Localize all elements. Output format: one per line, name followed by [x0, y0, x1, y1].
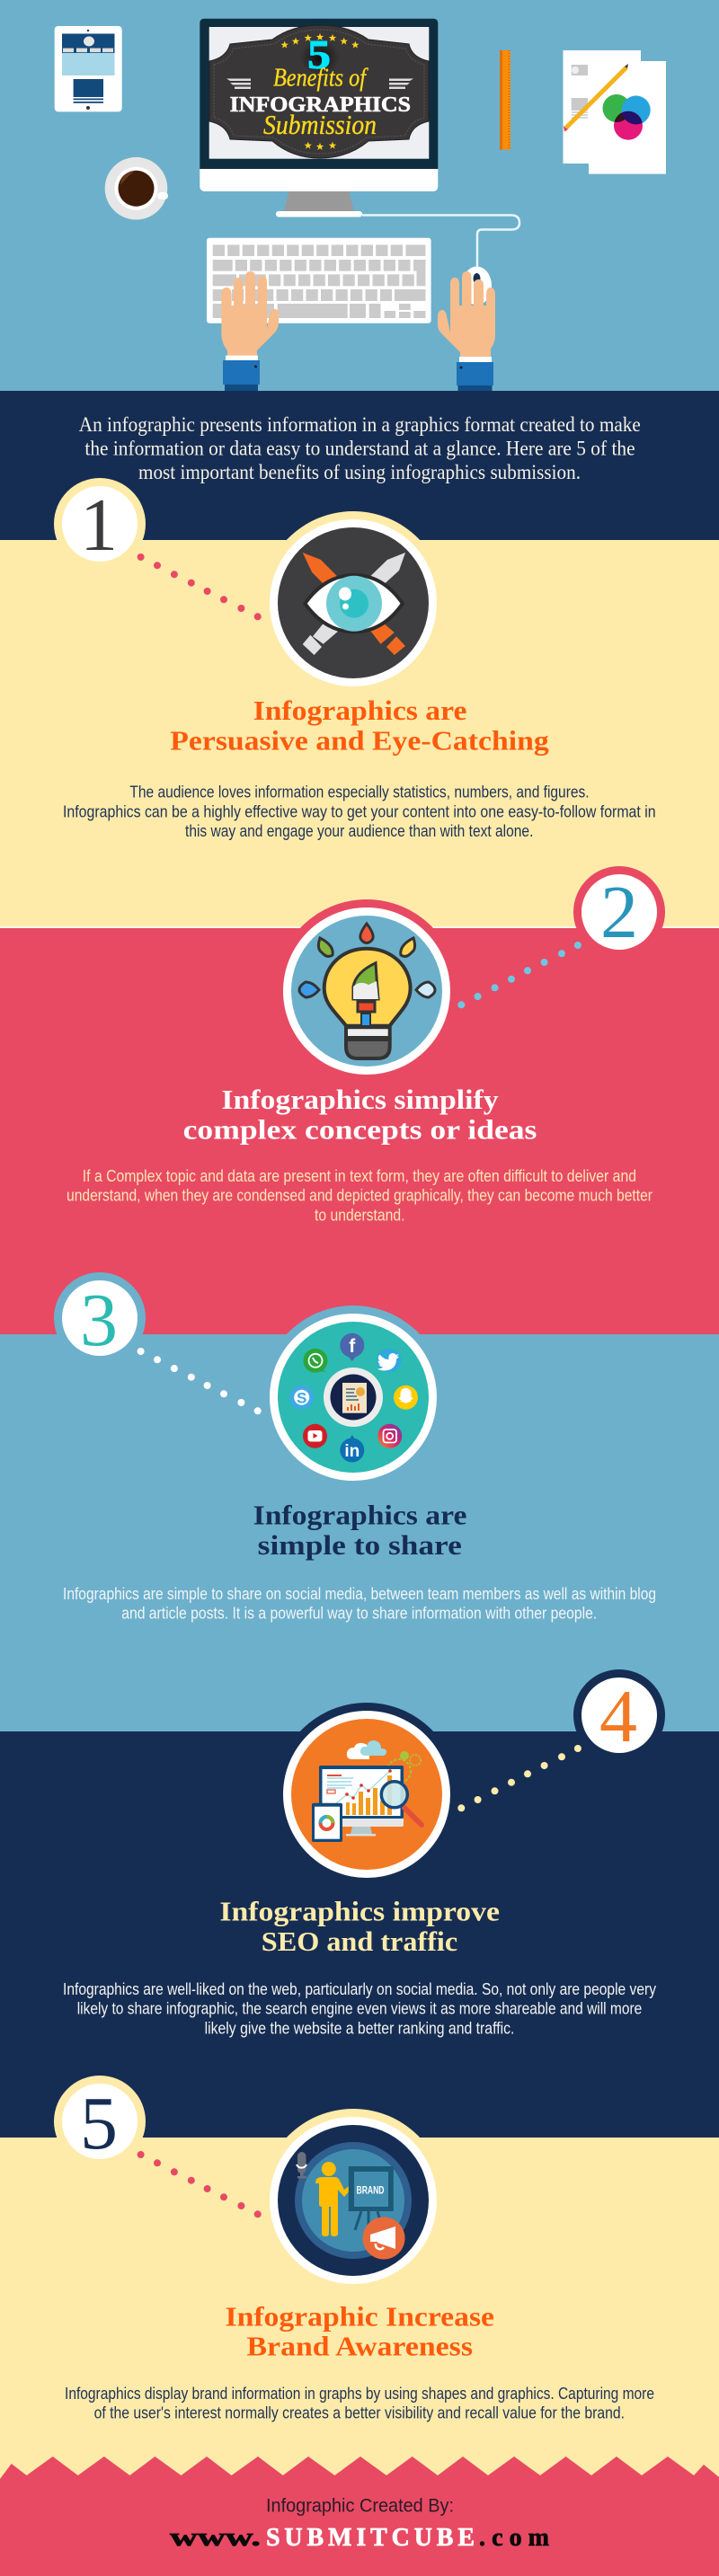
icon: coffee cup — [105, 157, 168, 219]
body text 1 — [63, 783, 656, 840]
icon: ruler — [500, 50, 510, 149]
social icons — [289, 1333, 418, 1463]
panel: benefit 5 — [0, 2076, 719, 2479]
social icons: in — [344, 1442, 360, 1461]
title plaque: Submission — [263, 109, 377, 140]
title plaque: Benefits of — [273, 64, 368, 93]
heading 1: Infographics are — [253, 695, 466, 726]
text: introduction paragraph: the information or data easy to understand at a glance. Here are 5 of the — [84, 437, 635, 460]
icon: brand presenter: BRAND — [356, 2183, 385, 2196]
footer website — [170, 2524, 549, 2552]
icon: SEO analytics on monitor — [275, 1703, 458, 1886]
body text 2: to understand. — [315, 1206, 404, 1224]
body text 4: likely to share infographic, the search engine even views it as more shareable and will more — [77, 2000, 642, 2018]
panel: benefit 3 — [0, 1272, 719, 1731]
number badge 1 — [54, 478, 146, 570]
icon: mouse — [462, 266, 492, 305]
heading 3 — [253, 1500, 466, 1561]
icon: monitor — [200, 19, 438, 217]
body text 5: of the user's interest normally creates a better visibility and recall value for the brand. — [94, 2404, 625, 2422]
heading 2: complex concepts or ideas — [183, 1113, 537, 1145]
number badge 5 — [54, 2076, 146, 2167]
heading 3: simple to share — [258, 1529, 462, 1561]
footer website: SUBMITCUBE — [266, 2524, 475, 2552]
heading 1: Persuasive and Eye-Catching — [170, 724, 549, 756]
social icons: S — [297, 1389, 306, 1407]
text: introduction paragraph: most important benefits of using infographics submission. — [138, 461, 581, 483]
footer website: www. — [170, 2524, 261, 2552]
panel: introduction — [0, 391, 719, 540]
panel: benefit 4 — [0, 1669, 719, 2138]
body text 3: and article posts. It is a powerful way to share information with other people. — [121, 1605, 597, 1623]
panel: header desk scene — [0, 0, 719, 391]
dotted connector 5 — [138, 2151, 262, 2217]
icon: keyboard — [207, 238, 431, 323]
icon: eye with crossed pencils — [262, 511, 445, 695]
icon: brand presenter — [262, 2109, 445, 2292]
icon: paper sheets with pencil and colour circles — [563, 50, 666, 174]
heading 1 — [170, 695, 549, 756]
title plaque: 5 — [307, 31, 331, 77]
body text 4: likely give the website a better ranking and traffic. — [205, 2019, 514, 2037]
number badge 4 — [573, 1669, 665, 1761]
number badge 2: 2 — [600, 871, 638, 954]
icon: right hand — [438, 271, 495, 391]
panel: benefit 1 — [0, 478, 719, 927]
body text 3 — [63, 1585, 656, 1623]
heading 4: SEO and traffic — [262, 1925, 457, 1957]
dotted connector 1 — [138, 553, 262, 620]
dotted connector 4 — [457, 1745, 581, 1811]
heading 3: Infographics are — [253, 1500, 466, 1531]
dotted connector 2 — [457, 942, 581, 1008]
number badge 5: 5 — [80, 2082, 118, 2165]
footer website: .com — [479, 2524, 549, 2552]
heading 4 — [219, 1896, 500, 1957]
icon: light bulb with paint brush — [275, 899, 458, 1083]
heading 5: Brand Awareness — [246, 2331, 473, 2362]
dotted connector 3 — [138, 1348, 262, 1414]
icon: monitor cable — [362, 216, 519, 268]
number badge 3 — [54, 1272, 146, 1364]
icon: social media wheel — [262, 1306, 445, 1489]
icon: tablet — [55, 26, 122, 111]
icon: left hand — [221, 271, 279, 391]
body text 1: Infographics can be a highly effective way to get your content into one easy-to-follow format in — [63, 802, 656, 820]
heading 5: Infographic Increase — [225, 2301, 494, 2333]
panel: benefit 2 — [0, 866, 719, 1334]
body text 2 — [67, 1167, 652, 1224]
text: introduction paragraph: An infographic presents information in a graphics format created to make — [79, 413, 641, 436]
number badge 4: 4 — [599, 1675, 637, 1758]
body text 1: The audience loves information especially statistics, numbers, and figures. — [129, 783, 590, 801]
title plaque: INFOGRAPHICS — [230, 93, 411, 117]
text: introduction paragraph — [79, 413, 641, 483]
number badge 1: 1 — [80, 483, 118, 567]
number badge 3: 3 — [80, 1279, 118, 1362]
panel: footer — [0, 2456, 719, 2576]
heading 5 — [225, 2301, 494, 2362]
heading 4: Infographics improve — [219, 1896, 500, 1927]
title plaque — [209, 25, 429, 158]
body text 5 — [65, 2385, 654, 2422]
heading 2 — [183, 1084, 537, 1145]
social icons: f — [349, 1336, 356, 1357]
body text 4 — [63, 1980, 656, 2037]
number badge 2 — [573, 866, 665, 958]
footer credit line: Infographic Created By: — [266, 2496, 454, 2516]
body text 1: this way and engage your audience than with text alone. — [185, 822, 533, 840]
heading 2: Infographics simplify — [221, 1084, 499, 1115]
body text 2: If a Complex topic and data are present in text form, they are often difficult to deliver and — [83, 1167, 636, 1185]
